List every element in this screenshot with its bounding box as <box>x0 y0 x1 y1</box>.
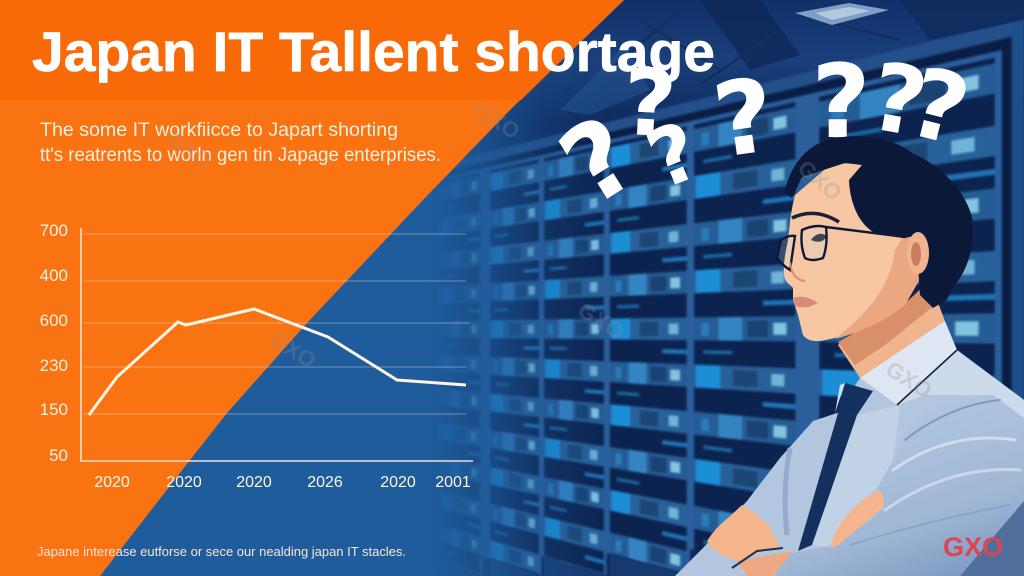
shirt <box>675 350 1024 576</box>
logo: GXO <box>943 532 1003 562</box>
cuff line <box>732 548 783 568</box>
forearm skin <box>737 551 793 576</box>
x axis labels: 2026 <box>307 474 343 491</box>
shirt shoulder <box>897 350 1024 418</box>
line chart <box>40 221 473 491</box>
chart axes <box>81 228 473 461</box>
blue diagonal fade <box>0 0 610 576</box>
x axis labels: 2020 <box>236 474 272 491</box>
ceiling structure <box>560 0 1024 115</box>
left hand <box>707 505 780 561</box>
sleeve shadow <box>960 501 1024 576</box>
watermarks: GXO <box>163 127 217 174</box>
x axis labels <box>94 474 471 491</box>
data line <box>89 309 466 415</box>
x axis labels: 2020 <box>166 474 202 491</box>
y axis labels: 400 <box>40 266 68 285</box>
glasses <box>777 226 905 270</box>
rack bottom fill <box>440 553 687 576</box>
orange diagonal panel <box>0 0 624 576</box>
question mark 7: ? <box>898 46 980 168</box>
nose <box>790 262 805 281</box>
caption: Japane interease eutforse or sece our nealding japan IT stacles. <box>37 544 406 559</box>
tie <box>798 383 873 551</box>
y axis labels <box>40 221 68 465</box>
question mark 4: ? <box>707 56 782 182</box>
face shading <box>835 225 925 339</box>
watermarks: GXO <box>793 155 847 206</box>
watermarks: GXO <box>882 356 936 403</box>
folded arm sleeve <box>775 395 1024 576</box>
watermarks: GXO <box>470 97 524 144</box>
watermarks: GXO <box>266 326 320 373</box>
right hand <box>830 490 884 548</box>
watermarks <box>163 97 936 403</box>
shirt front panel <box>812 405 900 548</box>
x axis labels: 2020 <box>94 474 130 491</box>
subtitle text block: tt's reatrents to worln gen tin Japage enterprises. <box>40 145 441 166</box>
sleeve folds <box>850 400 1020 545</box>
question mark 3: ? <box>635 104 713 207</box>
question mark 6: ? <box>862 43 935 159</box>
question mark 1: ? <box>540 93 657 229</box>
left arm fold <box>785 448 790 535</box>
x axis labels: 2020 <box>380 474 416 491</box>
hair <box>785 136 973 308</box>
person illustration <box>675 136 1024 576</box>
y axis labels: 600 <box>40 311 68 330</box>
neck <box>838 300 945 405</box>
subtitle text block <box>40 120 441 166</box>
question marks <box>540 43 980 229</box>
subtitle text block: The some IT workfiicce to Japart shorting <box>40 120 398 141</box>
y axis labels: 150 <box>40 400 68 419</box>
face <box>784 160 925 341</box>
question mark 5: ? <box>811 43 871 162</box>
y axis labels: 230 <box>40 356 68 375</box>
ceiling light <box>795 3 889 25</box>
collar <box>835 321 957 413</box>
title: Japan IT Tallent shortage <box>32 20 715 83</box>
chart gridlines <box>83 234 470 414</box>
neck shadow <box>838 285 935 365</box>
question mark 2: ? <box>620 49 679 158</box>
y axis labels: 50 <box>49 446 68 465</box>
eye <box>811 234 827 242</box>
watermarks: GXO <box>574 297 628 344</box>
x axis labels: 2001 <box>435 474 471 491</box>
eyebrow <box>792 213 839 222</box>
ear <box>907 232 929 274</box>
y axis labels: 700 <box>40 221 68 240</box>
lips <box>793 297 818 307</box>
